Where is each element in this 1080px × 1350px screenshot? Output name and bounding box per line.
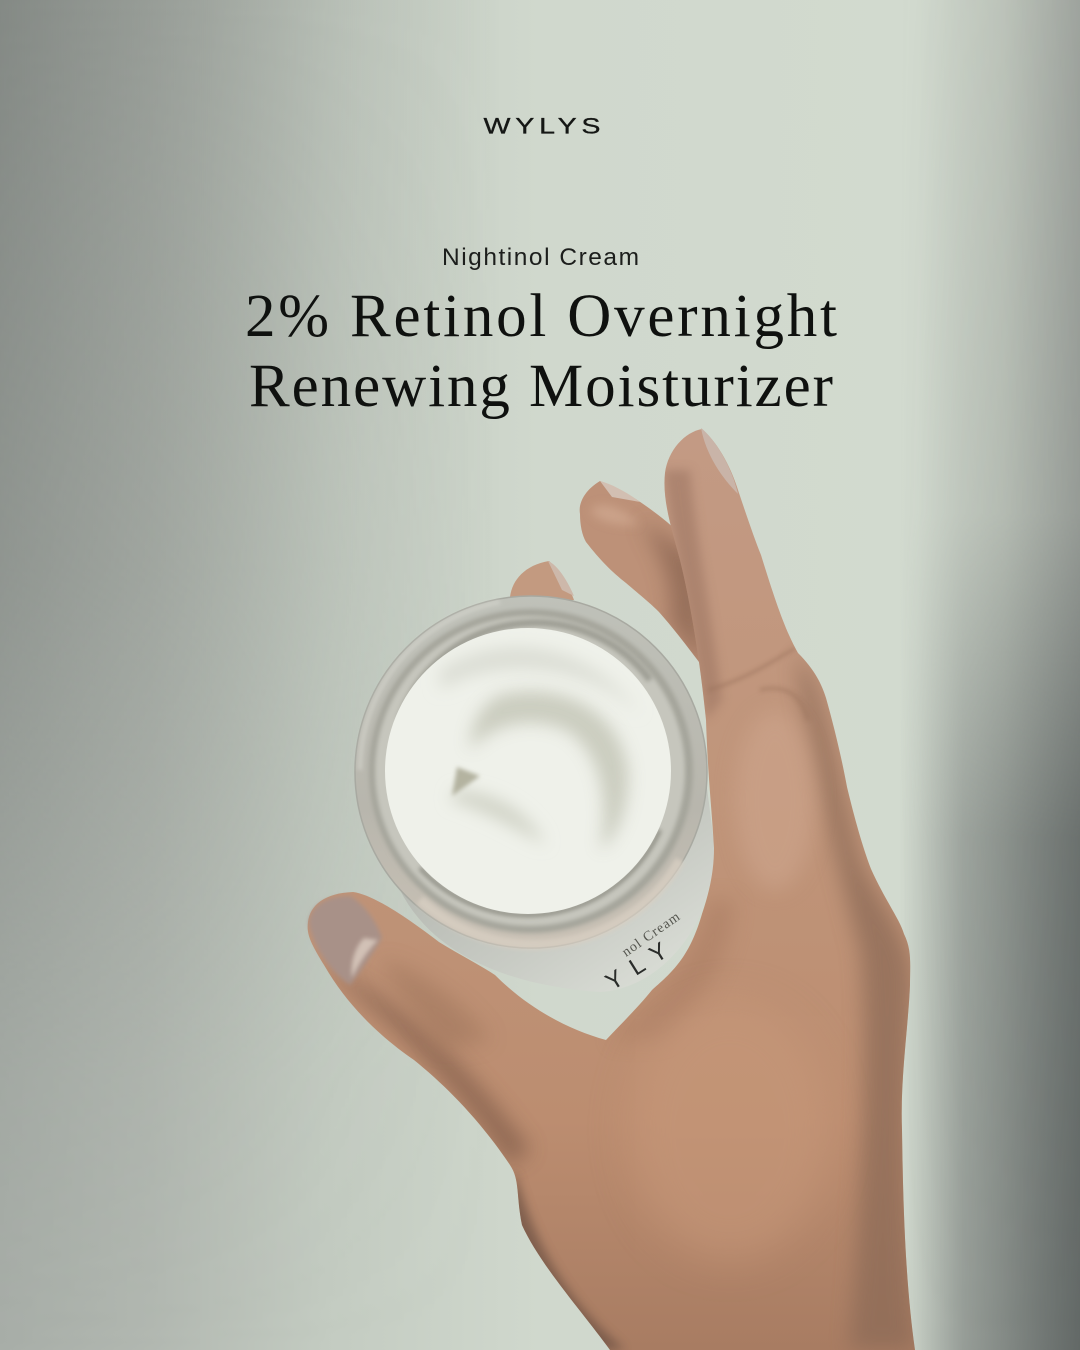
- jar: [355, 596, 714, 996]
- shadow: outer hand edge: [798, 653, 915, 1350]
- ring finger tip: [510, 561, 574, 606]
- logo: WYLYS: [484, 115, 600, 139]
- shadow: thumb underside: [334, 976, 532, 1167]
- nail: index finger: [701, 428, 738, 494]
- shadow: palm crease by jar: [634, 905, 728, 1032]
- second finger: [580, 481, 710, 670]
- jar body: [400, 780, 714, 992]
- shadow: finger left edge: [664, 470, 722, 720]
- hand: [308, 428, 915, 1350]
- subtitle: Nightinol Cream: [442, 244, 639, 271]
- highlight: palm: [659, 1155, 800, 1252]
- shadow: wrist lower left: [514, 1174, 624, 1350]
- finger creases: [718, 648, 794, 688]
- cream: [385, 628, 671, 914]
- title: 2% Retinol Overnight: [245, 283, 837, 350]
- nail: thumb: [309, 896, 382, 985]
- jar: nol Cream: [620, 909, 684, 960]
- title: [245, 283, 837, 420]
- jar glass rim: [355, 596, 707, 948]
- jar label text: YLY: [601, 931, 683, 996]
- title: Renewing Moisturizer: [249, 353, 833, 420]
- back fingers: [510, 481, 710, 670]
